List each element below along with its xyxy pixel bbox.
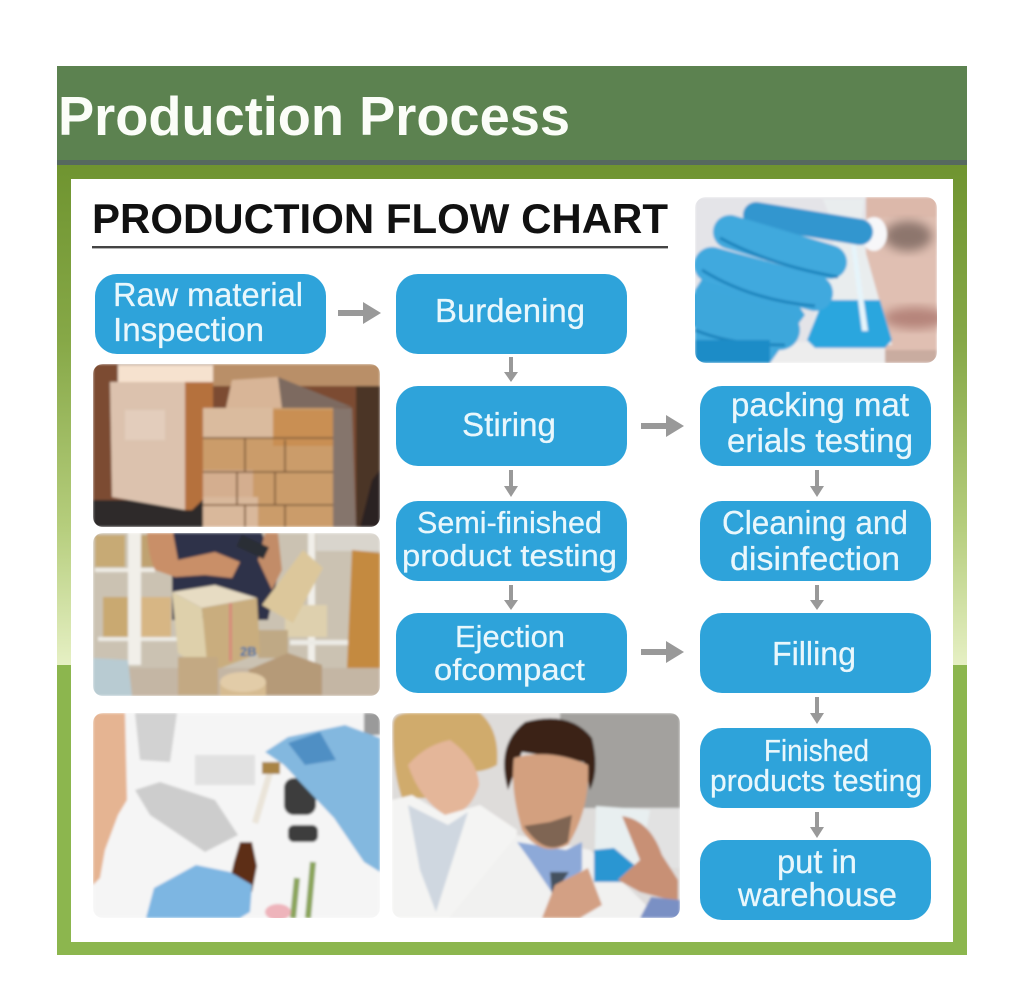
white panel [71, 179, 953, 942]
header bar [57, 66, 967, 165]
title: Production Process [58, 85, 570, 147]
step: finished products testing: products testing [710, 763, 922, 798]
photo: scanning a parcel: 2B [240, 644, 257, 659]
step: burdening: Burdening [435, 292, 585, 329]
arrow: semi-finished to ejection [504, 585, 518, 610]
step: semi-finished product testing: product testing [402, 538, 617, 573]
arrow: cleaning to filling [810, 585, 824, 610]
arrow: ejection to filling [641, 641, 684, 663]
step: packing materials testing: erials testing [727, 422, 913, 459]
arrow: stiring to packing [641, 415, 684, 437]
photo: scanning a parcel [93, 533, 380, 696]
step: finished products testing [700, 728, 931, 808]
step: ejection of compact [396, 613, 627, 693]
step: put in warehouse: warehouse [737, 876, 897, 913]
step: semi-finished product testing: Semi-finished [417, 505, 602, 540]
step: filling [700, 613, 931, 693]
step: raw material inspection: Inspection [113, 311, 264, 348]
step: cleaning and disinfection: disinfection [730, 540, 900, 577]
step: filling: Filling [772, 635, 856, 672]
step: raw material inspection: Raw material [113, 276, 303, 313]
step: finished products testing: Finished [764, 733, 869, 768]
arrow: stiring to semi-finished [504, 470, 518, 497]
step: put in warehouse: put in [777, 843, 857, 880]
step: ejection of compact: ofcompact [434, 652, 585, 687]
step: semi-finished product testing [396, 501, 627, 581]
photo: two scientists [392, 713, 680, 918]
arrow: filling to finished [810, 697, 824, 724]
arrow: packing to cleaning [810, 470, 824, 497]
chart heading: PRODUCTION FLOW CHART [92, 195, 668, 242]
step: burdening [396, 274, 627, 354]
photo: gloved hand holding flask [695, 197, 947, 363]
step: packing materials testing: packing mat [731, 386, 909, 423]
arrow: burdening to stiring [504, 357, 518, 382]
step: raw material inspection [95, 274, 326, 354]
step: ejection of compact: Ejection [455, 619, 565, 654]
arrow: finished to warehouse [810, 812, 824, 838]
green frame [57, 164, 967, 955]
step: packing materials testing [700, 386, 931, 466]
step: put in warehouse [700, 840, 931, 920]
step: cleaning and disinfection: Cleaning and [722, 504, 908, 541]
step: stiring [396, 386, 627, 466]
photo: pallets of cartons [93, 364, 380, 527]
arrow: raw material to burdening [338, 302, 381, 324]
step: stiring: Stiring [462, 406, 556, 443]
step: cleaning and disinfection [700, 501, 931, 581]
photo: dropper and amber bottle [93, 713, 380, 920]
